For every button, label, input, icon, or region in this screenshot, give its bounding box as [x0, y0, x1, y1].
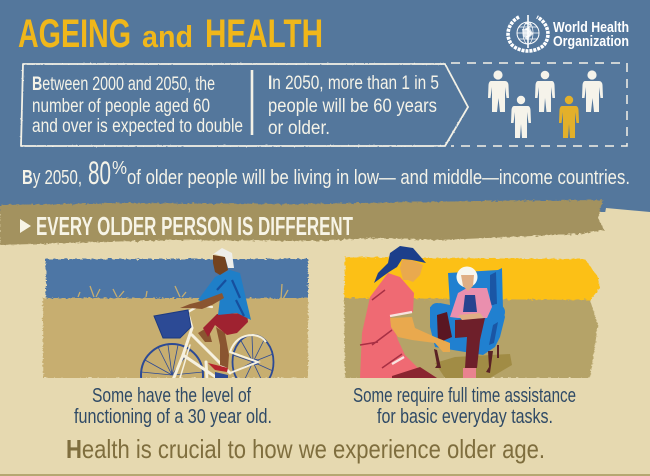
- white hair: [212, 248, 234, 268]
- background: beige lower section: [0, 208, 650, 476]
- basket: [154, 310, 191, 338]
- title: [18, 12, 323, 56]
- caption: right: for basic everyday tasks.: [377, 406, 553, 428]
- panel: statistics arrow box: [21, 64, 468, 146]
- text: doubling statistic: number of people aged 60: [32, 96, 210, 117]
- shorts: [203, 313, 248, 337]
- caption: left: Some have the level of: [92, 385, 251, 407]
- icon: WHO emblem: [508, 15, 548, 51]
- hair: [456, 266, 478, 288]
- text: 1 in 5 statistic: [268, 73, 439, 139]
- painted floor: [344, 298, 598, 378]
- painted ground: [43, 298, 308, 378]
- cardigan: [450, 288, 492, 318]
- logo: World Health Organization: [508, 15, 629, 51]
- banner heading: EVERY OLDER PERSON IS DIFFERENT: [36, 211, 353, 241]
- conclusion text: Health is crucial to how we experience older age.: [66, 434, 545, 464]
- title: AGEING: [18, 12, 131, 56]
- background: blue upper section: [0, 0, 650, 212]
- knee shadow: [437, 312, 452, 343]
- WHO name: World Health: [553, 20, 629, 36]
- painted sky: [46, 259, 308, 303]
- front wheel: [140, 343, 204, 378]
- icon: person 5: [582, 70, 603, 112]
- title: HEALTH: [205, 12, 323, 56]
- shirt: [198, 270, 251, 320]
- icon: person 3: [535, 71, 555, 112]
- text: 1 in 5 statistic: or older.: [268, 118, 330, 139]
- bottom edge strip: [0, 474, 650, 476]
- rear wheel: [229, 334, 274, 378]
- nurse arm: [390, 317, 450, 352]
- nurse hair: [374, 246, 426, 283]
- face: [213, 255, 228, 275]
- text: 80 percent statistic: By 2050,: [22, 167, 82, 189]
- caption: left: [74, 385, 272, 428]
- arm: [180, 293, 224, 309]
- grass tufts: [78, 284, 288, 299]
- text: 80 percent statistic: 80: [88, 155, 111, 191]
- caption: right: [353, 385, 576, 428]
- text: 80 percent statistic: [22, 155, 630, 191]
- nurse body: [360, 273, 437, 378]
- icon: person 2: [511, 96, 531, 138]
- icon: person 4 highlighted yellow: [559, 96, 579, 138]
- caption: right: Some require full time assistance: [353, 385, 576, 407]
- banner: every older person is different: [0, 200, 604, 245]
- icon: triangle bullet: [20, 219, 31, 233]
- shoe: [208, 363, 228, 372]
- cyclist legs: [198, 327, 229, 368]
- WHO name: [553, 20, 629, 50]
- panel: dashed people box: [451, 63, 627, 146]
- text: 1 in 5 statistic: In 2050, more than 1 in 5: [268, 73, 439, 94]
- armchair: [430, 268, 505, 355]
- older woman trousers: [455, 318, 485, 368]
- chair legs: [434, 345, 499, 373]
- bike frame: [173, 305, 258, 380]
- text: doubling statistic: and over is expected to double: [32, 116, 243, 137]
- nurse face: [400, 260, 423, 282]
- illustration: cyclist: [42, 248, 309, 378]
- shoe: [463, 368, 476, 378]
- title: and: [142, 19, 193, 54]
- text: doubling statistic: [32, 74, 243, 137]
- painted yellow wall: [344, 257, 600, 305]
- icon: person 1: [488, 70, 509, 112]
- text: 80 percent statistic: %: [112, 158, 127, 178]
- chair shadow: [435, 354, 512, 378]
- face: [461, 275, 474, 291]
- caption: left: functioning of a 30 year old.: [74, 406, 272, 428]
- hands: [458, 313, 484, 320]
- text: 1 in 5 statistic: people will be 60 years: [268, 96, 437, 117]
- text: doubling statistic: Between 2000 and 2050, the: [32, 74, 215, 95]
- WHO name: Organization: [553, 34, 629, 50]
- illustration: care worker and older woman: [344, 246, 600, 378]
